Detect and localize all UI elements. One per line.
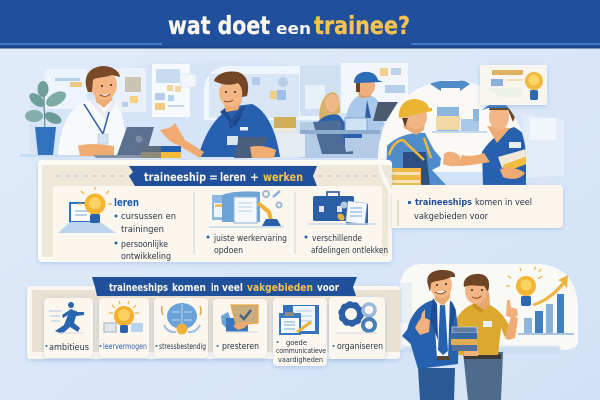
panel: traineeship = leren + werken: [38, 160, 392, 262]
person: man in blue suit with thumbs up: [402, 270, 458, 400]
card: goede communicatieve vaardigheden: goede: [286, 339, 307, 347]
ribbon heading: komen: [172, 281, 206, 294]
card: leervermogen: leervermogen: [103, 342, 147, 351]
ribbon heading: in: [211, 281, 219, 294]
card: presteren: [213, 299, 267, 358]
card: organiseren: organiseren: [337, 341, 383, 351]
ribbon heading: voor: [317, 281, 340, 294]
office background scene: [20, 61, 564, 178]
circle: handshake scene: [378, 80, 526, 185]
title: een: [276, 19, 311, 38]
icon: monitor with robot arm: [209, 191, 284, 227]
callout: traineeships komen in veel vakgebieden voor: komen in veel: [475, 197, 532, 208]
building illustration: [432, 107, 487, 133]
title: [168, 11, 410, 40]
person: worker with cap and tablet: [345, 72, 398, 130]
card: goede communicatieve vaardigheden: vaardigheden: [278, 356, 323, 364]
person: blond woman at desk: [300, 92, 380, 154]
text: verschillende afdelingen: verschillende: [312, 233, 362, 244]
card: ambitieus: ambitieus: [49, 342, 89, 352]
ribbon heading: werken: [263, 170, 303, 184]
ribbon heading: [92, 277, 357, 296]
text: leren: [114, 197, 176, 262]
ribbon heading: =: [209, 170, 218, 184]
person: worker with helmet: [386, 99, 446, 185]
icon: books held: [450, 327, 479, 356]
title: wat doet: [168, 11, 270, 40]
card: lamp note: [480, 65, 547, 105]
ribbon heading: traineeships: [109, 281, 168, 294]
card: stressbestendig: [154, 298, 208, 358]
header banner: [0, 0, 600, 48]
text: leren: leren: [114, 197, 139, 209]
ribbon heading: +: [250, 170, 259, 184]
person: worker with cap and books: [443, 105, 526, 185]
ribbon heading: leren: [220, 170, 246, 184]
card: goede communicatieve vaardigheden: [273, 298, 327, 366]
icon: double arrow: [430, 80, 470, 91]
callout: traineeships komen in veel vakgebieden voor: [378, 160, 563, 228]
ribbon heading: [129, 166, 317, 186]
person: trainee with laptop: [58, 66, 126, 156]
text: juiste werkervaring: [206, 233, 287, 256]
bar chart with arrow: [518, 275, 574, 334]
card: leervermogen: [99, 298, 149, 358]
text: leren: persoonlijke: [121, 239, 168, 250]
card: presteren: presteren: [222, 341, 259, 351]
ribbon heading: veel: [222, 281, 243, 294]
card: organiseren: [329, 297, 385, 359]
title: trainee?: [314, 11, 410, 40]
icon: stack of books: [141, 146, 181, 158]
text: leren: ontwikkeling: [121, 251, 171, 262]
icon: briefcase with clipboard: [308, 192, 376, 225]
icon: lamp with laptop: [58, 187, 116, 233]
panel: traineeships komen in veel vakgebieden voor: [27, 277, 400, 366]
icon: plant: [25, 81, 69, 155]
panel: right illustration backdrop: [400, 264, 578, 353]
card: ambitieus: [44, 298, 93, 358]
text: juiste werkervaring: juiste werkervaring: [213, 233, 287, 244]
icon: lamp: [506, 267, 542, 306]
card: stressbestendig: stressbestendig: [159, 342, 206, 351]
person: colleague with tablet: [160, 71, 280, 158]
text: leren: cursussen en: [121, 211, 176, 222]
person: man in yellow shirt with thumbs up: [457, 274, 518, 400]
ribbon heading: vakgebieden: [247, 281, 313, 294]
card: goede communicatieve vaardigheden: communicatieve: [276, 347, 326, 355]
text: leren: trainingen: [121, 224, 164, 235]
icon: laptop: [93, 127, 154, 158]
ribbon heading: traineeship: [144, 170, 206, 184]
callout: traineeships komen in veel vakgebieden voor: vakgebieden voor: [414, 211, 488, 222]
text: juiste werkervaring: opdoen: [214, 245, 243, 256]
text: verschillende afdelingen: [304, 233, 388, 256]
callout: traineeships komen in veel vakgebieden voor: traineeships: [415, 197, 472, 208]
text: verschillende afdelingen: afdelingen ontlekken: [311, 245, 388, 256]
